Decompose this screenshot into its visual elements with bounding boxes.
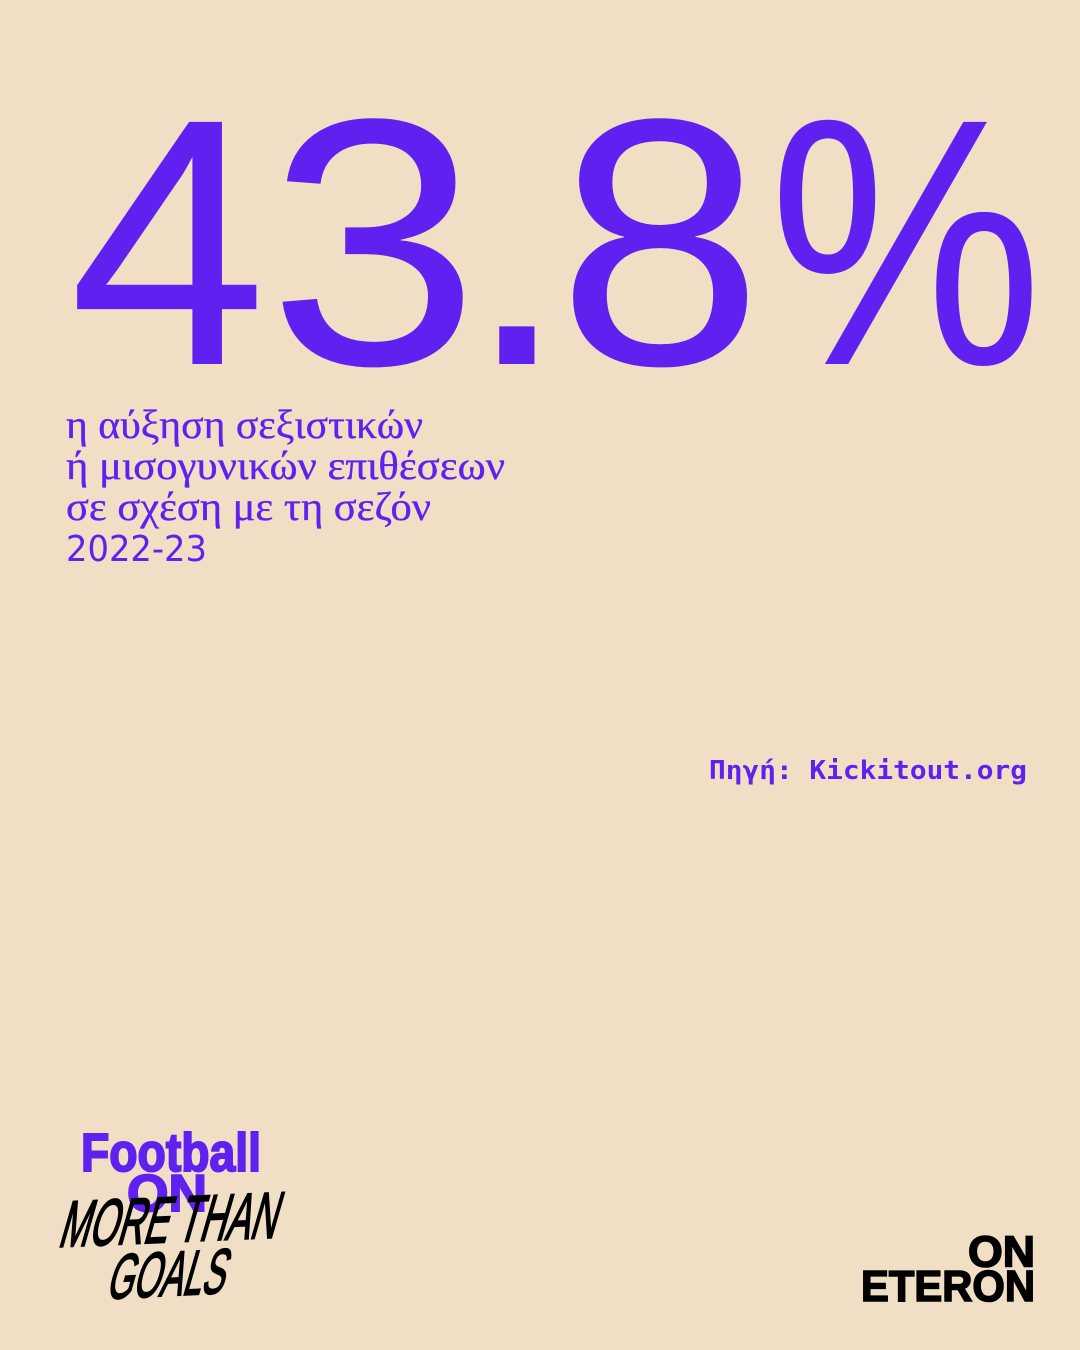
description text block — [66, 402, 505, 570]
logo: ON ETERON — [861, 1228, 1035, 1311]
headline statistic: 43.8%: 3 — [268, 45, 479, 439]
logo wordmark: Football: Football — [81, 1123, 261, 1183]
logo: Football ON More Than Goals — [53, 1123, 291, 1313]
logo script: MORE THAN: MORE THAN — [53, 1179, 291, 1262]
headline statistic: 43.8% — [69, 45, 1043, 440]
description text block: 2022-23 — [66, 529, 207, 570]
description text block: σε σχέση με τη σεζόν — [66, 484, 431, 529]
headline statistic: 43.8%: . — [466, 46, 568, 439]
description text block: η αύξηση σεξιστικών — [66, 402, 423, 447]
source credit: Πηγή: Kickitout.org — [709, 756, 1027, 786]
logo: ON ETERON: ETERON — [861, 1262, 1035, 1311]
logo script: GOALS: GOALS — [101, 1235, 239, 1313]
headline statistic: 43.8%: % — [769, 47, 1043, 440]
logo wordmark: ON: ON — [127, 1165, 207, 1223]
headline statistic: 43.8%: 8 — [557, 46, 763, 439]
headline statistic: 43.8%: 4 — [69, 46, 267, 439]
logo: ON ETERON: ON — [968, 1228, 1035, 1276]
description text block: ή μισογυνικών επιθέσεων — [66, 443, 505, 488]
